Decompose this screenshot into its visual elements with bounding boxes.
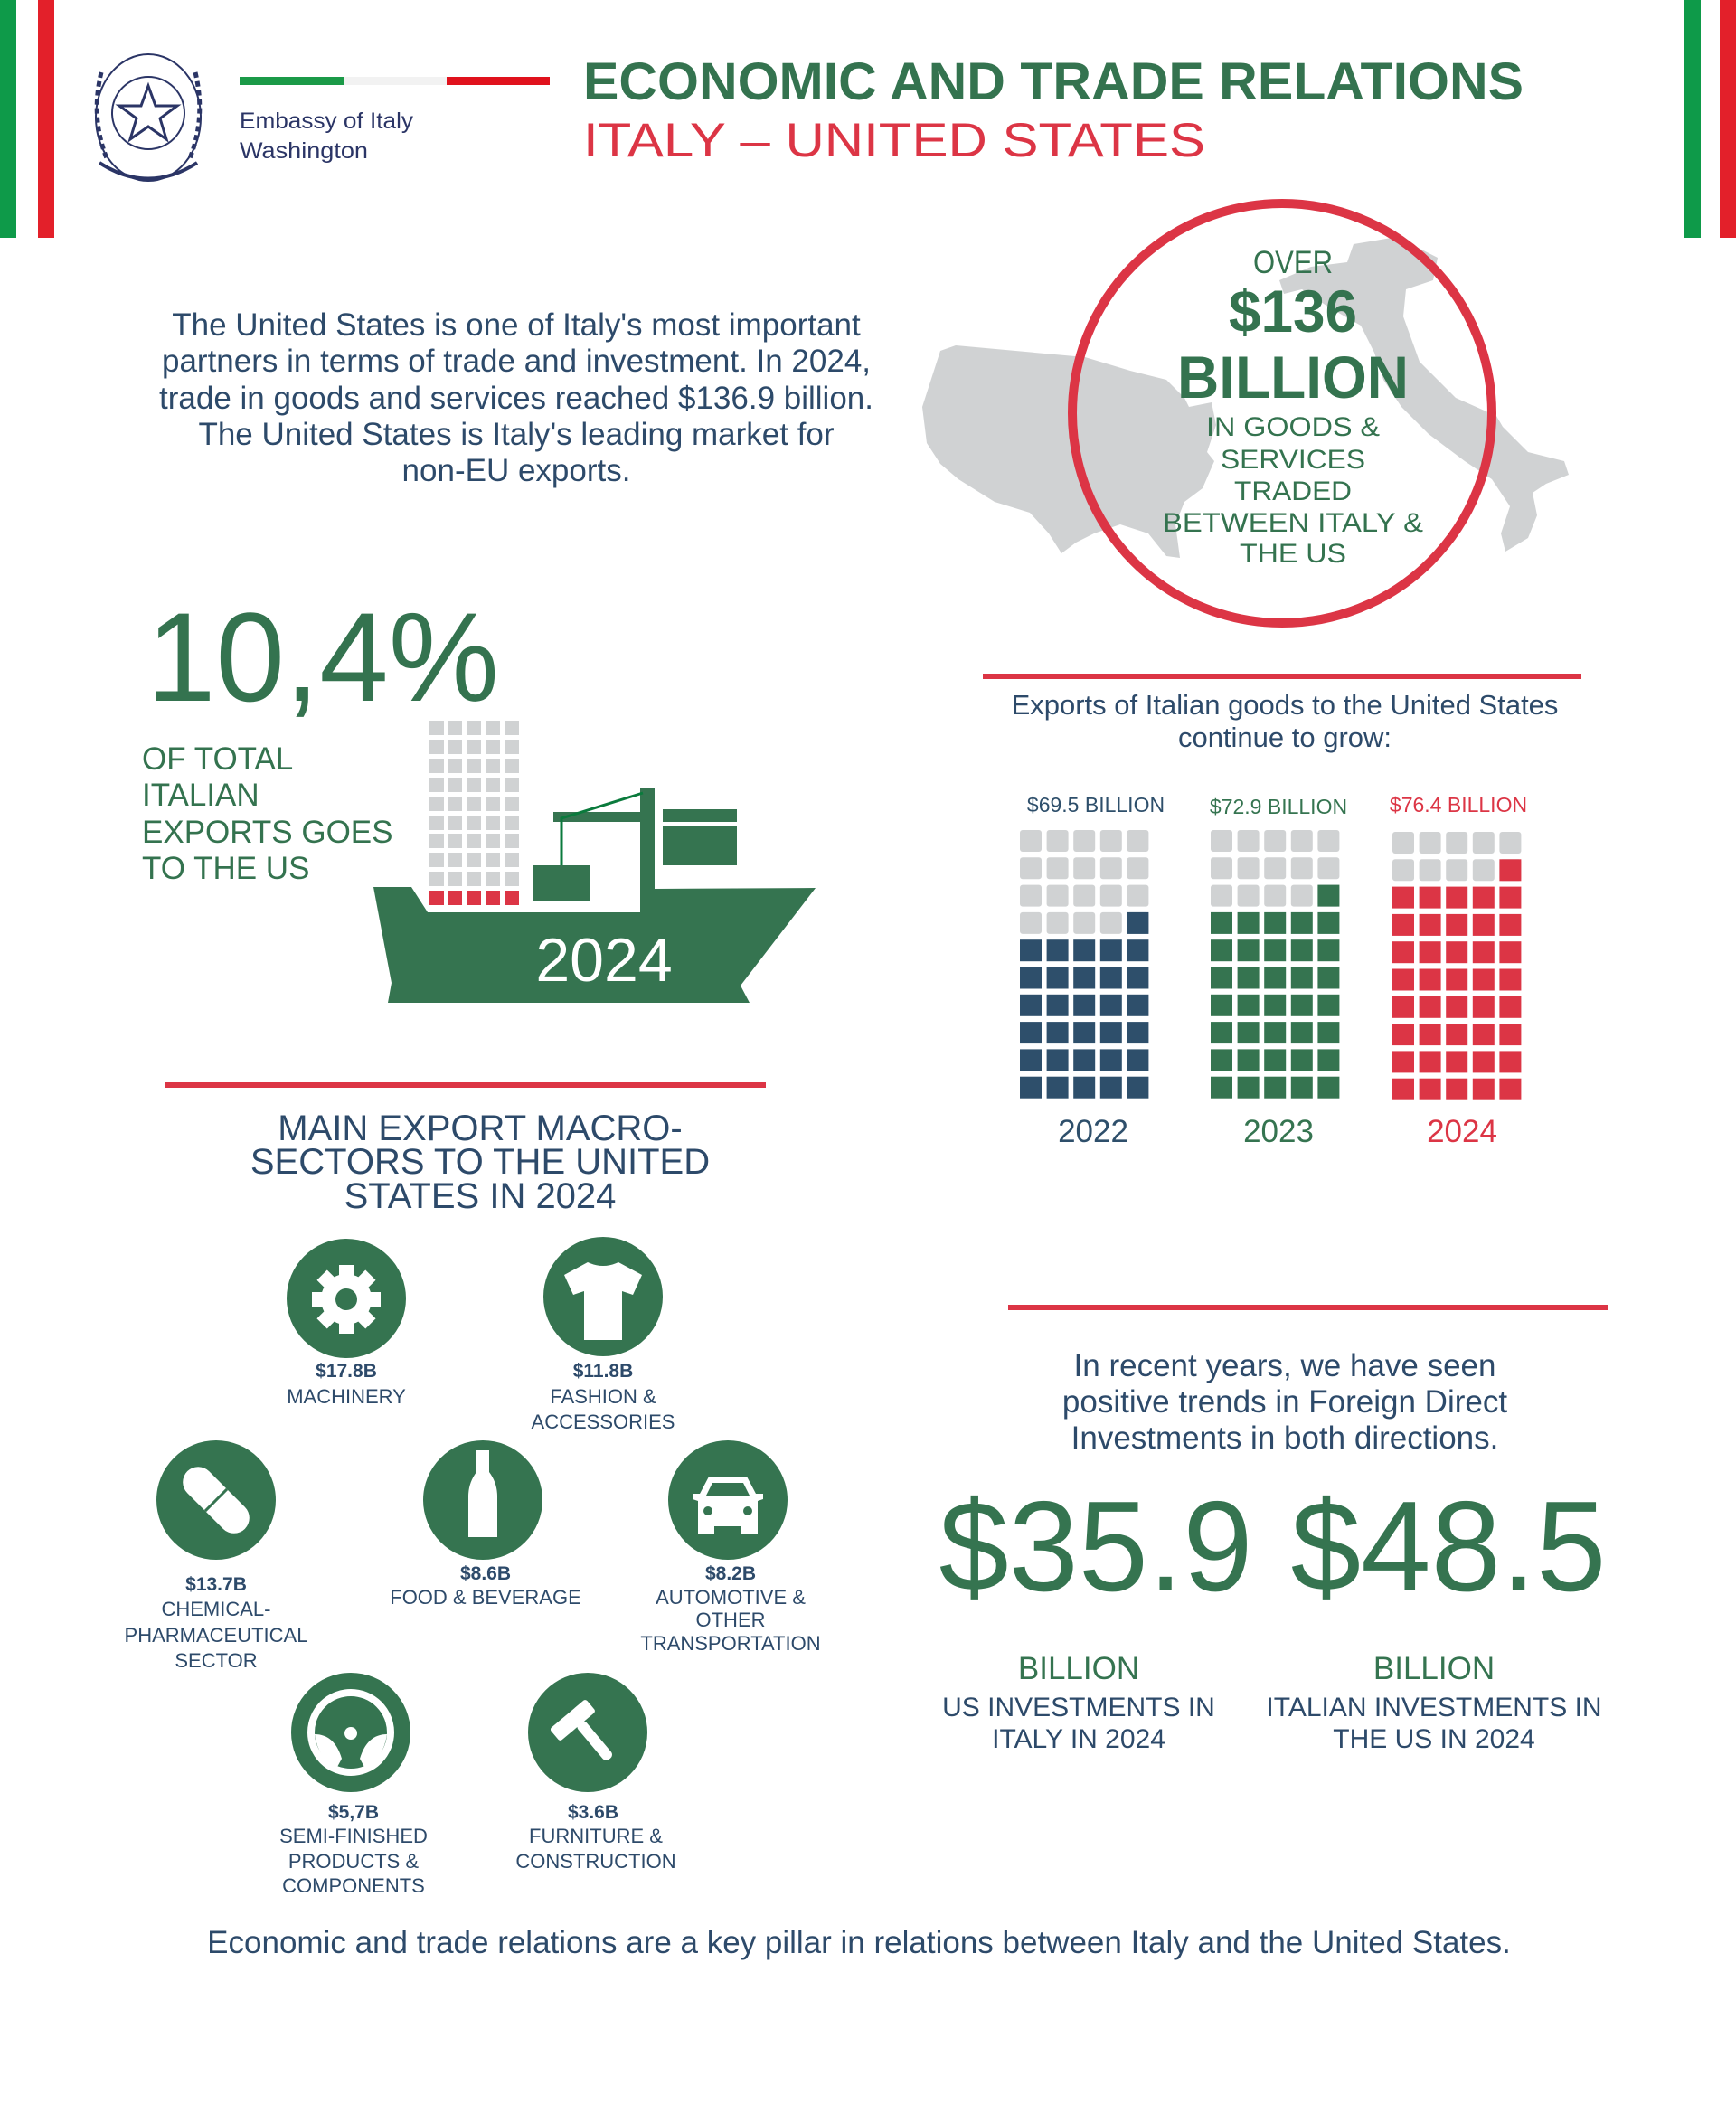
sector: food: $8.6B bbox=[460, 1563, 511, 1584]
investments intro bbox=[1062, 1348, 1507, 1456]
sector: automotive bbox=[640, 1440, 821, 1655]
icon: steering wheel bbox=[311, 1693, 391, 1772]
footer statement: Economic and trade relations are a key pillar in relations between Italy and the United States. bbox=[207, 1925, 1511, 1960]
stat: Italian investments: $48.5 bbox=[1291, 1475, 1606, 1619]
stat label: ITALIAN bbox=[142, 778, 259, 813]
sector: semi-finished bbox=[279, 1673, 428, 1897]
ship illustration bbox=[373, 721, 816, 1003]
sector: food bbox=[390, 1440, 581, 1609]
stat label bbox=[142, 741, 392, 886]
sectors heading: SECTORS TO THE UNITED bbox=[250, 1142, 710, 1182]
callout circle: $136 billion: BILLION bbox=[1177, 344, 1409, 411]
callout circle: $136 billion: THE US bbox=[1240, 539, 1346, 569]
title: ECONOMIC AND TRADE RELATIONS bbox=[583, 52, 1524, 111]
sector: furniture: FURNITURE & bbox=[529, 1825, 663, 1847]
stat: US investments: US INVESTMENTS IN bbox=[942, 1693, 1215, 1722]
stat: US investments: ITALY IN 2024 bbox=[992, 1724, 1165, 1754]
callout circle: $136 billion: IN GOODS & bbox=[1206, 412, 1380, 442]
icon: emblem of Italy bbox=[96, 54, 201, 181]
ship illustration: 2024 bbox=[535, 926, 673, 995]
container stack bbox=[429, 721, 519, 886]
bar 2022: $69.5 BILLION bbox=[1027, 793, 1165, 816]
bar 2022: 2022 bbox=[1058, 1114, 1128, 1149]
sector: chemical-pharmaceutical: $13.7B bbox=[185, 1574, 247, 1595]
icon: bottle bbox=[468, 1450, 497, 1537]
callout circle: $136 billion: $136 bbox=[1229, 278, 1357, 344]
icon: gear bbox=[297, 1250, 395, 1348]
stat: US investments: BILLION bbox=[1018, 1651, 1139, 1686]
waffle chart bbox=[1020, 793, 1527, 1149]
sector: chemical-pharmaceutical: CHEMICAL- bbox=[161, 1598, 271, 1620]
callout circle: $136 billion: BETWEEN ITALY & bbox=[1163, 508, 1423, 538]
investments intro: positive trends in Foreign Direct bbox=[1062, 1384, 1507, 1420]
embassy name: Embassy of Italy bbox=[240, 109, 414, 134]
sector: automotive: OTHER bbox=[696, 1609, 765, 1631]
embassy name: Washington bbox=[240, 138, 368, 164]
stat: 10,4%: 10,4% bbox=[146, 586, 499, 728]
sectors heading: MAIN EXPORT MACRO- bbox=[278, 1109, 683, 1148]
sector: machinery: $17.8B bbox=[316, 1361, 377, 1382]
sectors heading bbox=[250, 1109, 710, 1216]
icon: hammer bbox=[550, 1699, 625, 1776]
sector: furniture: $3.6B bbox=[568, 1802, 618, 1823]
sector: automotive: TRANSPORTATION bbox=[640, 1632, 821, 1655]
callout circle: $136 billion: TRADED bbox=[1234, 477, 1352, 506]
sector: chemical-pharmaceutical bbox=[125, 1440, 307, 1672]
investments intro: In recent years, we have seen bbox=[1074, 1348, 1495, 1383]
intro paragraph: non-EU exports. bbox=[402, 453, 630, 488]
divider: investments bbox=[1008, 1305, 1608, 1310]
sector: fashion: FASHION & bbox=[550, 1385, 656, 1408]
sector: machinery bbox=[287, 1239, 406, 1408]
sector: food: FOOD & BEVERAGE bbox=[390, 1586, 581, 1609]
sector: semi-finished: PRODUCTS & bbox=[288, 1850, 419, 1873]
bar 2024: $76.4 BILLION bbox=[1390, 793, 1527, 816]
bar 2024 bbox=[1390, 793, 1527, 1149]
icon: car bbox=[693, 1477, 763, 1534]
icon: pill bbox=[176, 1460, 256, 1540]
stat: Italian investments: THE US IN 2024 bbox=[1333, 1724, 1535, 1754]
sector: automotive: $8.2B bbox=[705, 1563, 756, 1584]
stat: Italian investments bbox=[1266, 1475, 1606, 1754]
chart heading bbox=[1012, 689, 1558, 753]
flag stripes left bbox=[0, 0, 54, 238]
bar 2023: 2023 bbox=[1243, 1114, 1314, 1149]
embassy name bbox=[240, 109, 414, 164]
intro paragraph bbox=[159, 307, 873, 488]
flag line bbox=[240, 77, 550, 85]
sector: chemical-pharmaceutical: PHARMACEUTICAL bbox=[125, 1624, 307, 1647]
stat label: OF TOTAL bbox=[142, 741, 293, 777]
bar 2024: 2024 bbox=[1427, 1114, 1497, 1149]
stat: US investments bbox=[939, 1475, 1253, 1754]
investments intro: Investments in both directions. bbox=[1071, 1420, 1498, 1456]
map: US and Italy bbox=[922, 237, 1569, 558]
flag stripes right bbox=[1684, 0, 1736, 238]
sectors heading: STATES IN 2024 bbox=[344, 1176, 616, 1216]
chart heading: continue to grow: bbox=[1178, 722, 1392, 753]
stat: Italian investments: ITALIAN INVESTMENTS IN bbox=[1266, 1693, 1602, 1722]
stat: Italian investments: BILLION bbox=[1373, 1651, 1495, 1686]
bar 2023: $72.9 BILLION bbox=[1210, 795, 1347, 818]
intro paragraph: trade in goods and services reached $136.9 billion. bbox=[159, 381, 873, 416]
divider: exports chart bbox=[983, 674, 1581, 679]
sector: semi-finished: SEMI-FINISHED bbox=[279, 1825, 428, 1847]
callout circle: $136 billion bbox=[1072, 203, 1492, 623]
stat label: TO THE US bbox=[142, 851, 309, 886]
subtitle: ITALY – UNITED STATES bbox=[583, 114, 1205, 167]
sector: automotive: AUTOMOTIVE & bbox=[656, 1586, 806, 1609]
divider: sectors bbox=[165, 1082, 766, 1088]
sector: fashion: ACCESSORIES bbox=[532, 1411, 675, 1433]
bar 2023 bbox=[1210, 795, 1347, 1149]
sector: chemical-pharmaceutical: SECTOR bbox=[175, 1649, 258, 1672]
callout circle: $136 billion: SERVICES bbox=[1221, 445, 1365, 475]
sector: semi-finished: COMPONENTS bbox=[282, 1874, 425, 1897]
intro paragraph: The United States is Italy's leading market for bbox=[198, 417, 835, 452]
sector: machinery: MACHINERY bbox=[287, 1385, 406, 1408]
stat: US investments: $35.9 bbox=[939, 1475, 1253, 1619]
bar 2022 bbox=[1020, 793, 1165, 1149]
chart heading: Exports of Italian goods to the United States bbox=[1012, 689, 1558, 721]
icon: t-shirt bbox=[564, 1262, 642, 1340]
sector: furniture bbox=[515, 1673, 676, 1873]
sector: fashion: $11.8B bbox=[573, 1361, 633, 1382]
sector: furniture: CONSTRUCTION bbox=[515, 1850, 676, 1873]
intro paragraph: partners in terms of trade and investment. In 2024, bbox=[162, 344, 871, 379]
callout circle: $136 billion: OVER bbox=[1253, 245, 1333, 280]
sector: semi-finished: $5,7B bbox=[328, 1802, 379, 1823]
sector: fashion bbox=[532, 1237, 675, 1433]
intro paragraph: The United States is one of Italy's most important bbox=[172, 307, 861, 343]
stat label: EXPORTS GOES bbox=[142, 815, 392, 850]
